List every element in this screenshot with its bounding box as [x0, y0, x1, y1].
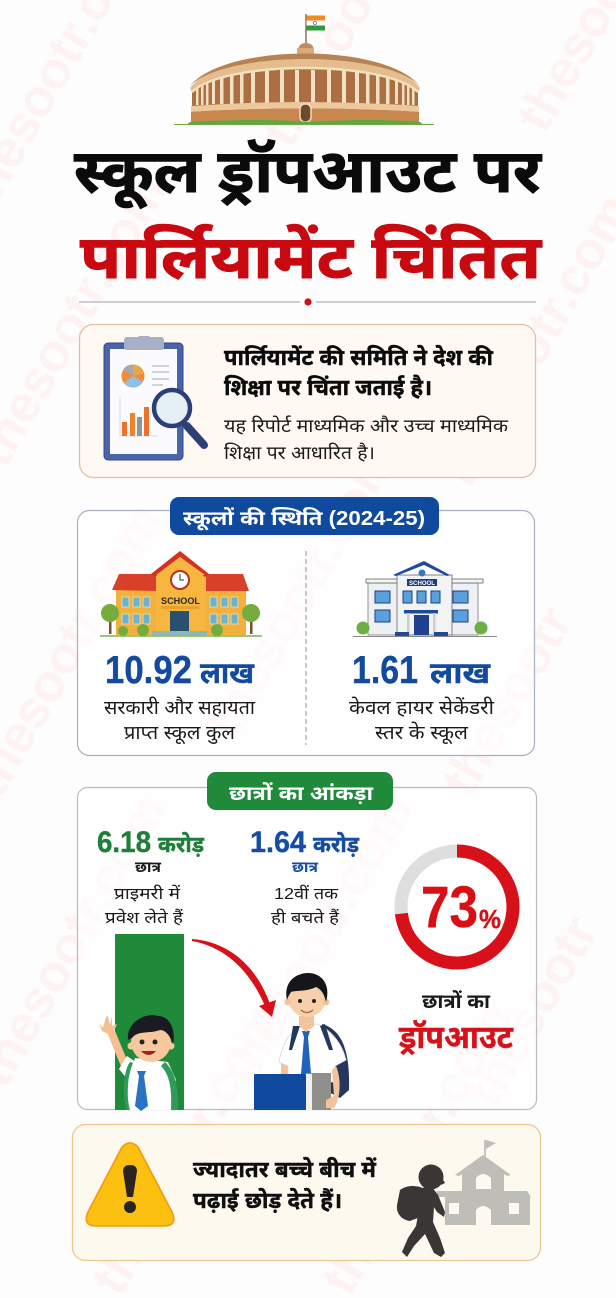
stat: 10.92 lakh: लाख [200, 657, 255, 690]
icon: child silhouette walking away [397, 1164, 445, 1257]
stat: 6.18 crore students: प्राइमरी में [114, 884, 181, 903]
stat: 10.92 lakh: 10.92 [105, 649, 192, 692]
infographic canvas: thesootr.com [210, 784, 424, 1096]
text: students dropout: छात्रों का [422, 990, 491, 1013]
stat: 1.61 lakh [352, 649, 491, 692]
text: warning message [193, 1157, 377, 1214]
text: government and aided schools: सरकारी और सहायता [104, 697, 256, 719]
text: committee description [224, 415, 509, 463]
chart: 73 percent donut: 73 [421, 875, 478, 940]
stat: 6.18 crore students: प्रवेश लेते हैं [105, 908, 184, 927]
heading pill: school status [170, 497, 439, 535]
heading pill: school status: स्कूलों की स्थिति (2024-25) [183, 506, 425, 531]
stat: 1.64 crore students: छात्र [292, 859, 319, 876]
panel: school status [78, 497, 534, 756]
icon: parliament building with flag [174, 14, 434, 125]
stat: 6.18 crore students: 6.18 [97, 826, 151, 859]
stat: 6.18 crore students: करोड़ [158, 832, 204, 858]
icon: orange government school: SCHOOL [161, 596, 200, 606]
icon: clipboard with magnifier [104, 336, 204, 460]
heading pill: student figures: छात्रों का आंकड़ा [229, 781, 374, 805]
stat: 10.92 lakh [105, 649, 255, 692]
stat: 1.61 lakh: लाख [430, 657, 491, 690]
stat: 1.61 lakh: 1.61 [352, 649, 418, 692]
icon: faded school building [436, 1140, 531, 1225]
panel: committee concern [80, 324, 536, 478]
infographic canvas: thesootr.com [195, 434, 409, 746]
icon: orange government school [100, 551, 262, 636]
bar: primary enrolment [115, 934, 184, 1110]
text: higher secondary only: केवल हायर सेकेंडरी [349, 696, 495, 719]
text: committee headline [224, 345, 494, 400]
text: warning message: ज्यादातर बच्चे बीच में [193, 1157, 377, 1182]
illustration: young boy waving [99, 1015, 178, 1111]
text: higher secondary only: स्तर के स्कूल [375, 721, 469, 745]
icon: warning triangle [86, 1143, 174, 1226]
text: government and aided schools: प्राप्त स्कूल कुल [124, 723, 236, 745]
infographic canvas: thesootr [455, 907, 609, 1116]
text: government and aided schools [104, 697, 256, 745]
panel: warning callout [72, 1124, 540, 1260]
infographic canvas: thesootr.com [80, 992, 294, 1298]
stat: 1.64 crore students: ही बचते हैं [271, 908, 340, 927]
chart: 73 percent donut: % [479, 904, 501, 934]
title line 1: स्कूल ड्रॉपआउट पर [74, 138, 543, 209]
stat: 1.64 crore students: 1.64 [250, 826, 306, 859]
text: committee description: यह रिपोर्ट माध्यमिक और उच्च माध्यमिक [224, 415, 509, 436]
text: higher secondary only [349, 696, 495, 745]
icon: white higher secondary school [353, 561, 497, 636]
infographic canvas: thesootr [430, 597, 584, 806]
infographic canvas: thesootr.com [310, 992, 524, 1298]
text: students dropout: ड्रॉपआउट [398, 1019, 514, 1056]
panel: student figures [78, 772, 536, 1111]
text: committee headline: पार्लियामेंट की समिति ने देश की [224, 345, 494, 370]
text: committee headline: शिक्षा पर चिंता जताई है। [224, 374, 432, 400]
stat: 1.64 crore students: 12वीं तक [274, 884, 339, 903]
stat: 6.18 crore students: छात्र [135, 859, 162, 876]
icon: white higher secondary school: SCHOOL [409, 581, 435, 587]
chart: 73 percent donut [401, 851, 513, 963]
text: warning message: पढ़ाई छोड़ देते हैं। [193, 1188, 342, 1214]
title line 2: पार्लियामेंट चिंतित [80, 224, 543, 291]
heading pill: student figures [207, 772, 393, 810]
stat: 1.64 crore students: करोड़ [313, 832, 359, 858]
stat: 6.18 crore students [97, 826, 204, 927]
divider with red dot [79, 298, 536, 306]
arrow: decline to class 12 [192, 939, 276, 1017]
text: students dropout [398, 990, 514, 1056]
illustration: older student with books [254, 973, 349, 1110]
text: committee description: शिक्षा पर आधारित है। [224, 441, 375, 463]
stat: 1.64 crore students [250, 826, 359, 927]
